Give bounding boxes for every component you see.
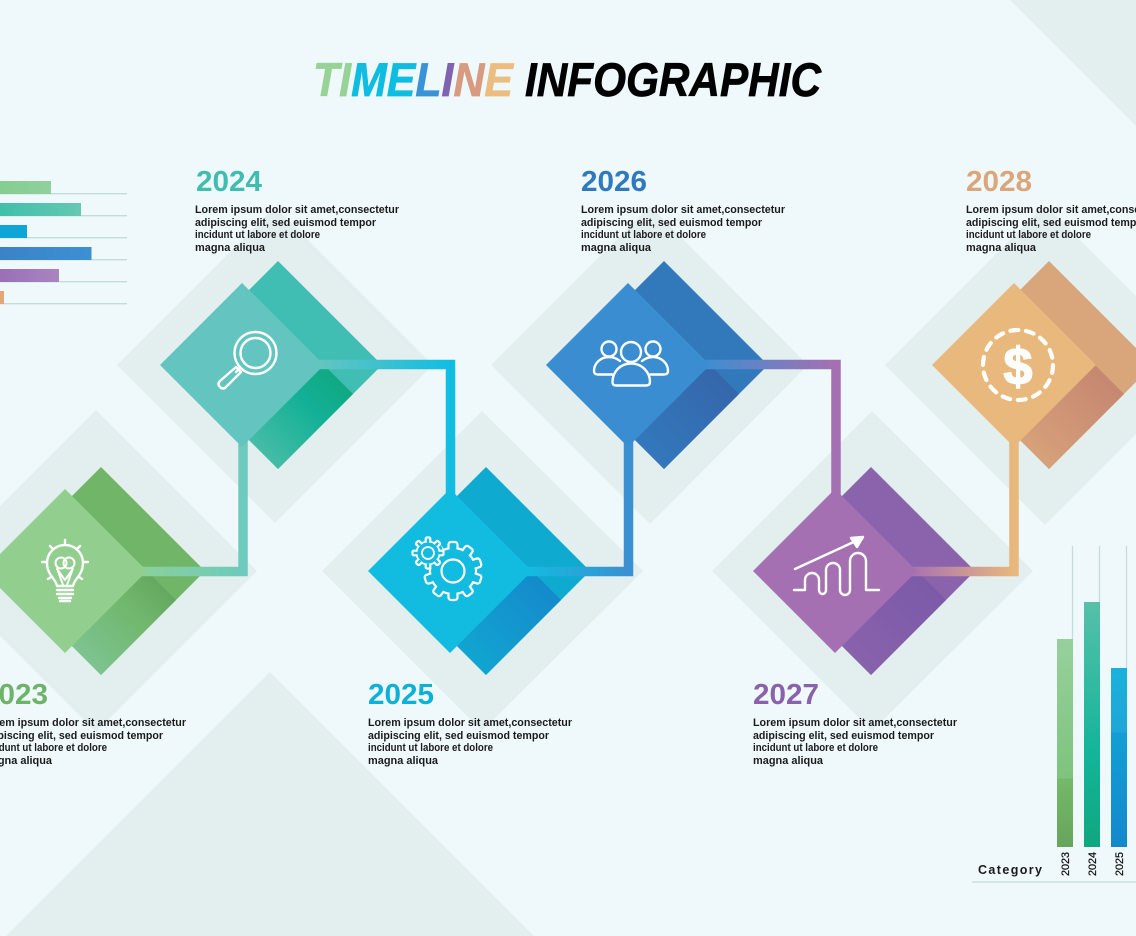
icon: people bbox=[594, 342, 668, 386]
icon: magnifying glass bbox=[218, 332, 276, 388]
icon: growth chart bbox=[794, 537, 879, 595]
icon: gears bbox=[412, 538, 482, 600]
title: TIMELINE bbox=[313, 53, 514, 106]
text block 2027 bbox=[753, 679, 958, 767]
text block 2026: 2026 bbox=[581, 166, 647, 198]
text block 2026: adipiscing elit, sed euismod tempor bbox=[581, 217, 763, 229]
back diamond 2024 bbox=[174, 261, 382, 469]
text block 2027: 2027 bbox=[753, 679, 819, 711]
connector 2024 to 2025 bbox=[300, 364, 450, 510]
text block 2024 bbox=[195, 166, 400, 254]
front diamond 2023 bbox=[0, 489, 147, 653]
vertical bar chart: 2024 bbox=[1087, 852, 1099, 876]
icon: dollar bbox=[983, 330, 1053, 400]
text block 2024: Lorem ipsum dolor sit amet,consectetur bbox=[195, 204, 400, 216]
text block 2026: Lorem ipsum dolor sit amet,consectetur bbox=[581, 204, 786, 216]
back diamond 2027 bbox=[767, 467, 975, 675]
connector 2026 to 2027 bbox=[690, 364, 836, 510]
text block 2026 bbox=[581, 166, 786, 254]
text block 2025: incidunt ut labore et dolore bbox=[368, 742, 493, 754]
text block 2025: Lorem ipsum dolor sit amet,consectetur bbox=[368, 717, 573, 729]
text block 2024: 2024 bbox=[196, 166, 262, 198]
front diamond 2025 bbox=[368, 489, 532, 653]
vertical bar chart bbox=[972, 546, 1136, 882]
decorative bottom triangle bbox=[6, 672, 534, 936]
vertical bar chart: 2023 bbox=[1060, 852, 1072, 876]
back diamond 2025 bbox=[382, 467, 590, 675]
vertical bar chart: Category bbox=[978, 863, 1042, 877]
icon: dollar: $ bbox=[1004, 338, 1033, 396]
halo diamonds bbox=[0, 205, 1136, 732]
text block 2027: adipiscing elit, sed euismod tempor bbox=[753, 730, 935, 742]
text block 2027: magna aliqua bbox=[753, 755, 824, 767]
text block 2028: magna aliqua bbox=[966, 242, 1037, 254]
front diamond 2028 bbox=[932, 283, 1096, 447]
text block 2028 bbox=[966, 166, 1136, 254]
decorative corner triangle bbox=[1010, 0, 1136, 126]
front diamond 2024 bbox=[160, 283, 324, 447]
text block 2026: magna aliqua bbox=[581, 242, 652, 254]
text block 2024: magna aliqua bbox=[195, 242, 266, 254]
connector 2025 to 2026 bbox=[515, 430, 628, 572]
text block 2023 bbox=[0, 679, 187, 767]
text block 2025: 2025 bbox=[368, 679, 434, 711]
back diamond 2023 bbox=[0, 467, 205, 675]
front diamond 2026 bbox=[546, 283, 710, 447]
text block 2025 bbox=[368, 679, 573, 767]
connector 2023 to 2024 bbox=[130, 430, 243, 572]
icon: light bulb bbox=[42, 540, 88, 601]
text block 2025: adipiscing elit, sed euismod tempor bbox=[368, 730, 550, 742]
back diamond 2026 bbox=[560, 261, 768, 469]
back diamond 2028 bbox=[945, 261, 1136, 469]
horizontal bar chart bbox=[0, 181, 127, 304]
text block 2027: incidunt ut labore et dolore bbox=[753, 742, 878, 754]
text block 2028: incidunt ut labore et dolore bbox=[966, 229, 1091, 241]
connector 2027 to 2028 bbox=[900, 430, 1014, 572]
vertical bar chart: 2025 bbox=[1114, 852, 1126, 876]
text block 2028: 2028 bbox=[966, 166, 1032, 198]
title bbox=[313, 53, 822, 106]
front diamond 2027 bbox=[753, 489, 917, 653]
text block 2025: magna aliqua bbox=[368, 755, 439, 767]
text block 2024: incidunt ut labore et dolore bbox=[195, 229, 320, 241]
title: INFOGRAPHIC bbox=[525, 53, 822, 106]
text block 2027: Lorem ipsum dolor sit amet,consectetur bbox=[753, 717, 958, 729]
text block 2026: incidunt ut labore et dolore bbox=[581, 229, 706, 241]
text block 2024: adipiscing elit, sed euismod tempor bbox=[195, 217, 377, 229]
